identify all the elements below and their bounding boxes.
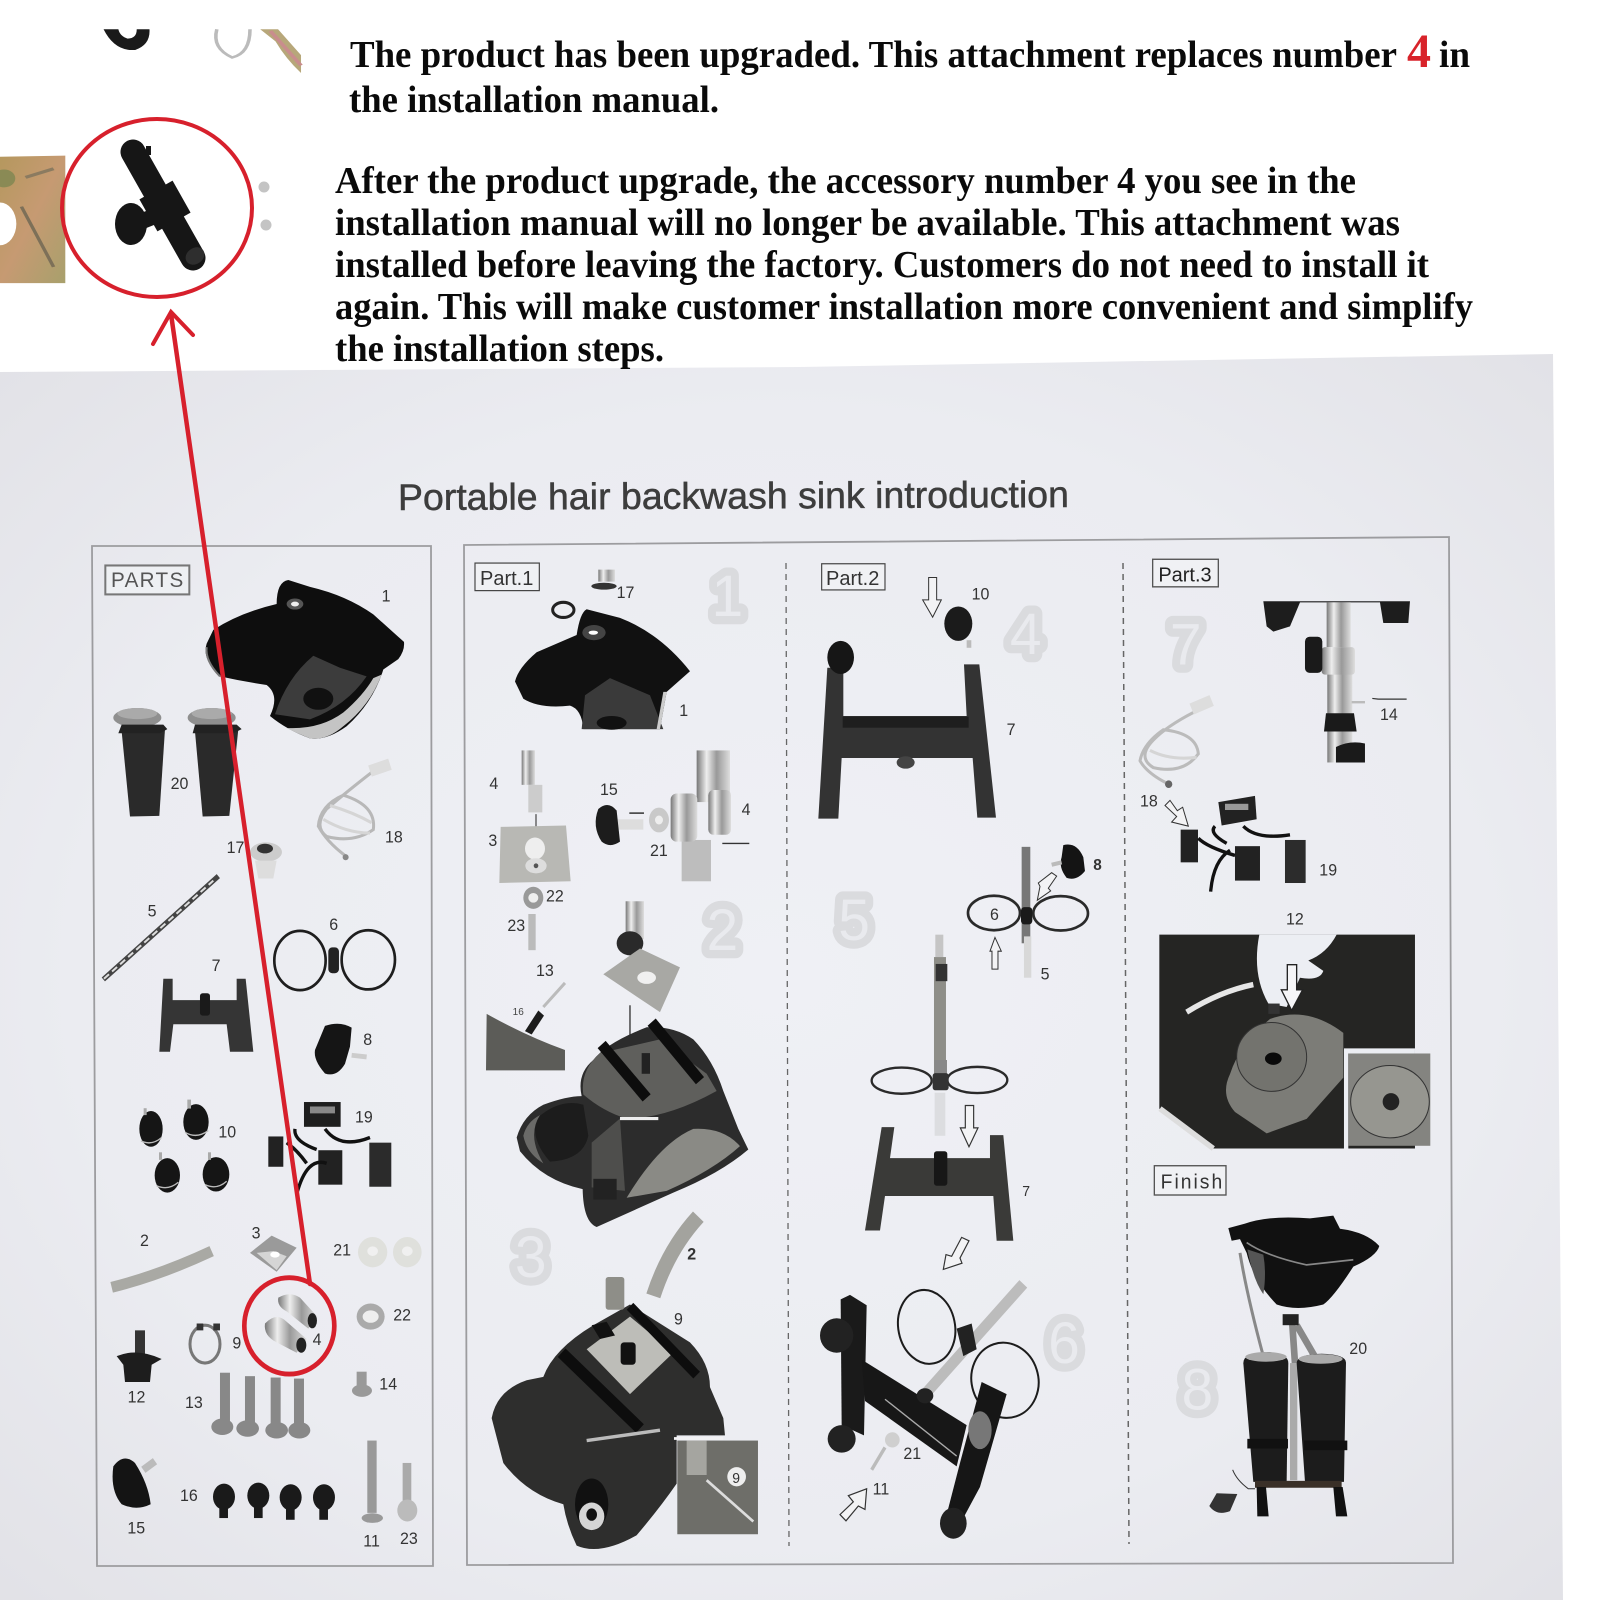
part 1 column lower: 2	[687, 1246, 696, 1264]
part 2 column upper: 7	[1007, 721, 1016, 739]
inset screw detail: 16	[513, 1007, 524, 1018]
up arrow outline	[990, 937, 1001, 969]
explanation paragraph: installation manual will no longer be available. This attachment was	[335, 202, 1400, 244]
part 20 tanks	[113, 708, 242, 817]
parts list lower: 16	[180, 1487, 198, 1505]
explanation paragraph: the installation steps.	[335, 328, 664, 370]
finish column	[1154, 1166, 1379, 1516]
explanation paragraph: After the product upgrade, the accessory number 4 you see in the	[335, 160, 1356, 202]
part 10 casters	[139, 1100, 229, 1193]
part 8 knob	[315, 1024, 367, 1074]
part 1 column upper: 3	[488, 832, 497, 850]
metal plate	[0, 156, 65, 283]
parts list upper: 5	[148, 902, 157, 920]
arrow to 14	[1372, 697, 1407, 701]
down arrow outline	[923, 578, 941, 617]
step number 7: 7	[1170, 612, 1202, 678]
caster 10	[944, 606, 972, 648]
part 13 screws	[211, 1373, 310, 1438]
plate with coupling step 2	[603, 901, 680, 1036]
paper background photo	[0, 354, 1563, 1600]
rod with rings	[968, 847, 1088, 978]
part 1 column upper: 4	[742, 801, 751, 819]
part 2 column lower: 11	[873, 1480, 889, 1499]
washer and bolt	[872, 1432, 900, 1470]
part 2 heading: Part.2	[826, 568, 879, 590]
dashed divider part 1 and 2	[786, 563, 789, 1546]
upgrade heading line 1: 4	[1407, 25, 1431, 78]
part 4 couplings	[265, 1294, 317, 1353]
knob 15	[596, 805, 644, 845]
washer 21	[649, 808, 669, 832]
part 3 heading: Part.3	[1158, 564, 1212, 587]
parts list lower: 12	[128, 1388, 145, 1407]
parts list upper: 18	[385, 828, 403, 847]
black coupling attachment	[115, 146, 208, 268]
parts list lower: 23	[400, 1530, 418, 1548]
part 22 nut	[357, 1303, 385, 1330]
upgraded attachment photo area	[0, 29, 301, 297]
part 3 bracket	[250, 1236, 297, 1272]
part 2 column upper: 6	[990, 906, 999, 924]
part 21 washers	[358, 1237, 422, 1267]
part 2 column upper: 8	[1093, 857, 1102, 874]
part 12 plug	[117, 1330, 162, 1382]
parts list lower: 2	[140, 1232, 149, 1250]
basin step 1	[515, 609, 690, 730]
upgrade heading line 1: The product has been upgraded. This attachment replaces number	[350, 34, 1397, 76]
coupling 4 chrome	[671, 750, 749, 881]
parts list lower: 15	[127, 1519, 145, 1538]
upgrade heading line 2: the installation manual.	[349, 79, 719, 121]
diagonal arrow to rings	[1037, 873, 1057, 900]
part 2 column lower: 7	[1022, 1184, 1030, 1200]
step number 4: 4	[1010, 602, 1041, 667]
part 15 knob	[113, 1459, 155, 1508]
plate 3	[499, 825, 571, 883]
fitting 17 with washer	[553, 570, 617, 617]
base 7 step 5	[865, 1127, 1013, 1241]
part 3 heading	[1153, 559, 1218, 587]
parts list lower: 21	[333, 1241, 351, 1260]
part 1 column upper: 23	[507, 917, 525, 935]
part 3 column	[1140, 559, 1430, 1149]
coupling piece on plate	[522, 750, 542, 857]
down arrow	[960, 1105, 978, 1147]
part 16 bolts	[213, 1483, 335, 1520]
finish heading: Finish	[1161, 1171, 1224, 1194]
parts list upper	[103, 565, 404, 1074]
diagonal arrow up	[840, 1489, 867, 1521]
parts list lower	[112, 1100, 422, 1550]
diagonal arrow to pump	[1165, 800, 1188, 826]
part 3 column: 19	[1319, 861, 1337, 879]
part 1 column lower	[492, 1022, 758, 1549]
step number 1: 1	[712, 564, 743, 629]
basin step 3	[492, 1277, 725, 1549]
part 1 column upper: 13	[536, 962, 554, 980]
column and clamp photo	[1263, 601, 1410, 762]
part 3 column: 12	[1286, 910, 1304, 929]
parts list lower: 10	[218, 1123, 236, 1142]
part 1 column upper: 17	[617, 584, 634, 602]
hose step 3	[653, 1217, 698, 1296]
finish heading	[1154, 1166, 1226, 1195]
panel: assembly frame	[464, 537, 1453, 1565]
part 2 column lower: 21	[903, 1445, 921, 1463]
panel: parts frame	[92, 546, 433, 1566]
part 9 clamp	[190, 1323, 220, 1363]
inset screw detail	[486, 983, 565, 1070]
assembled base step 6	[820, 1284, 1048, 1539]
step number 5: 5	[838, 888, 870, 953]
large basin underside	[517, 1022, 748, 1227]
parts list lower: 11	[363, 1532, 380, 1550]
red circle on part 4	[244, 1278, 334, 1374]
basin detail photo 12	[1159, 935, 1415, 1149]
diagonal arrow down	[943, 1237, 969, 1269]
part 1 column lower: 9	[674, 1310, 683, 1329]
part 14 screw	[352, 1372, 372, 1397]
parts list upper: 8	[363, 1031, 372, 1049]
part 1 column upper: 22	[546, 887, 564, 905]
part 2 column lower	[820, 1060, 1080, 1539]
part 3 column: 18	[1140, 792, 1158, 811]
part 1 heading: Part.1	[480, 568, 533, 590]
upgrade heading line 1: in	[1439, 34, 1470, 76]
part 1 column upper	[475, 563, 751, 1070]
part 11 long bolt	[362, 1441, 383, 1523]
parts heading: PARTS	[111, 569, 185, 592]
washer 22 and bolt 23	[523, 887, 543, 950]
parts list lower: 22	[393, 1306, 411, 1325]
dashed divider part 2 and 3	[1123, 563, 1129, 1544]
part 2 column upper: 5	[1041, 965, 1050, 984]
step number 8: 8	[1182, 1358, 1213, 1423]
parts list lower: 3	[252, 1224, 261, 1242]
parts list upper: 7	[212, 957, 221, 975]
parts list lower: 19	[355, 1108, 373, 1127]
parts list lower: 4	[313, 1331, 322, 1349]
parts list lower: 9	[232, 1334, 241, 1353]
base 7 with caster	[818, 641, 996, 819]
part 18 hose	[318, 764, 390, 860]
part 1 column upper: 1	[679, 702, 688, 720]
part 2 hose	[112, 1251, 212, 1287]
upgraded attachment text block	[335, 25, 1473, 370]
parts list lower: 13	[185, 1394, 203, 1412]
finished sink assembly	[1209, 1216, 1379, 1516]
part 1 column upper: 4	[489, 775, 498, 793]
inset detail 9: 9	[732, 1471, 740, 1487]
electronics 19	[1181, 796, 1306, 892]
parts list upper: 1	[382, 587, 391, 606]
title: Portable hair backwash sink introduction	[398, 474, 1069, 518]
step number 2: 2	[707, 898, 738, 963]
inset detail 9	[674, 1437, 758, 1534]
part 19 electronics	[268, 1102, 391, 1194]
rod and rings step 5	[872, 1060, 1007, 1136]
part 7 base	[159, 979, 253, 1052]
basin inset photo	[1344, 1048, 1430, 1149]
part 23 bolt	[397, 1463, 417, 1521]
cropped parts at top	[104, 29, 301, 73]
part 2 column upper: 10	[972, 585, 989, 604]
step number 6: 6	[1048, 1311, 1080, 1376]
small screws	[258, 182, 272, 230]
rod upper step 5	[934, 935, 947, 1074]
parts list upper: 6	[329, 916, 338, 934]
red circle highlight	[62, 119, 252, 297]
red arrow from part 4 to new attachment	[153, 312, 310, 1284]
finish column: 20	[1349, 1340, 1367, 1358]
explanation paragraph: again. This will make customer installation more convenient and simplify	[335, 286, 1473, 328]
part 6 rings	[274, 930, 395, 990]
hose 18	[1140, 700, 1212, 788]
part 5 rod	[103, 876, 218, 979]
part 17 drain	[250, 842, 282, 879]
part 1 column upper: 15	[600, 781, 618, 799]
part 1 column upper: 21	[650, 842, 668, 860]
parts list lower: 14	[379, 1375, 397, 1394]
part 1 heading	[475, 563, 539, 591]
explanation paragraph: installed before leaving the factory. Customers do not need to install it	[335, 244, 1429, 286]
step number 3: 3	[515, 1225, 547, 1290]
parts list upper: 20	[171, 775, 188, 793]
part 3 column: 14	[1380, 706, 1398, 724]
part 2 column upper	[818, 564, 1102, 1074]
knob 8	[1052, 844, 1085, 879]
parts list upper: 17	[227, 839, 244, 857]
explanation paragraph	[335, 160, 1473, 370]
part 1 basin	[206, 580, 404, 739]
